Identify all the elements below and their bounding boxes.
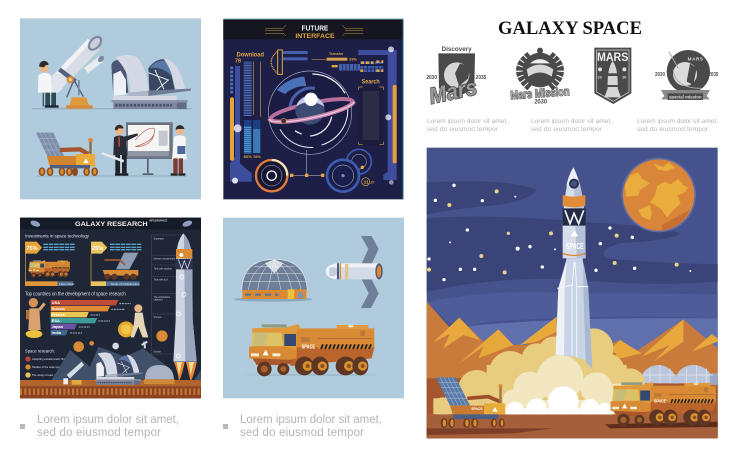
logo: mars shield: MARS	[597, 50, 628, 64]
caption: truck panel	[223, 414, 382, 439]
icon: rover	[436, 377, 505, 428]
chart labels: rocket callouts: chamber	[154, 299, 163, 302]
heading: galaxy research: GALAXY RESEARCH	[75, 221, 148, 228]
logo: discovery mars: 2030	[426, 75, 437, 81]
icon: rover: SPACE	[471, 407, 483, 411]
bar chart: top countries	[25, 292, 131, 335]
logo captions: sed do eiusmod tempor	[427, 126, 499, 133]
icon: astronaut statue	[26, 298, 45, 338]
bar chart: top countries: Russia	[52, 306, 66, 311]
block: space research list: Analyzing extraterrestric flights	[32, 357, 69, 361]
block: search	[359, 79, 383, 145]
block: investments	[25, 234, 142, 286]
icon: bottom dials	[256, 149, 374, 192]
stars	[427, 184, 691, 281]
block: transfer status: Transfer	[329, 52, 344, 56]
sky bands	[427, 181, 718, 352]
logo captions: sed do eiusmod tempor	[531, 126, 603, 133]
logo: mars special mission	[655, 50, 718, 100]
mountains	[427, 302, 718, 385]
icon: space truck	[245, 324, 378, 376]
scene: mountains and base	[20, 341, 201, 398]
ground	[427, 378, 718, 438]
logo: mars special mission: 2035	[708, 72, 718, 78]
icon: truck: SPACE	[654, 399, 666, 404]
block: transfer status	[271, 50, 383, 74]
icon: truck	[607, 382, 719, 426]
icon: small planet	[156, 330, 168, 342]
heading: galaxy research	[30, 219, 193, 228]
block: download meters	[235, 52, 264, 159]
icon: space truck: SPACE	[302, 344, 315, 350]
logo: mars mission: Mars Mission	[510, 84, 570, 102]
logo: discovery mars: 2035	[476, 75, 486, 81]
icon: presenter	[101, 125, 138, 176]
chart labels: rocket callouts: Nozzle	[154, 352, 161, 354]
block: download meters: 76%	[253, 154, 261, 159]
icon: launching rocket: SPACE	[566, 241, 584, 251]
panel: galaxy research infographic	[20, 218, 201, 398]
caption: truck panel: Lorem ipsum dolor sit amet,	[240, 414, 382, 426]
logo: mars special mission: MARS	[688, 57, 703, 62]
icon: bottom dials: 27	[370, 180, 374, 184]
logo row: mars badges	[426, 46, 718, 109]
chart labels: rocket callouts: Separator	[154, 237, 164, 240]
caption: research panel: Lorem ipsum dolor sit amet,	[37, 414, 179, 426]
chart labels: rocket callouts: Interior compartment	[154, 257, 175, 260]
heading: future interface: FUTURE	[302, 24, 328, 33]
title: GALAXY SPACE	[498, 18, 642, 39]
panel: dome, satellite and truck	[223, 218, 404, 398]
block: investments: 25%	[92, 246, 103, 252]
bar chart: top countries: Japan	[52, 324, 64, 329]
icon: presentation board	[126, 122, 173, 175]
icon: rocket	[173, 233, 197, 382]
heading: future interface	[265, 24, 363, 40]
caption: research panel	[20, 414, 179, 439]
icon: mars planet	[621, 158, 696, 232]
icon: mars rover	[36, 133, 98, 176]
logo: mars mission	[510, 48, 570, 106]
bar chart: top countries: USA	[52, 300, 60, 305]
icon: telescope	[41, 33, 105, 109]
block: download meters: 78	[235, 59, 241, 65]
chart labels: rocket callouts: Tank with fuel	[154, 279, 168, 282]
block: download meters: 60%	[244, 154, 252, 159]
launch smoke	[433, 328, 645, 418]
panel: scientists and telescope	[20, 18, 201, 199]
icon: satellite	[326, 236, 383, 308]
panel: rocket launch scene	[427, 148, 719, 438]
icon: ringed planet hud	[268, 71, 354, 154]
panel: future interface	[223, 19, 404, 199]
heading: future interface: INTERFACE	[295, 34, 335, 40]
chart labels: rocket callouts	[152, 235, 183, 354]
bar chart: top countries: India	[52, 330, 62, 335]
bar chart: top countries: Top countries on the development of space research	[25, 292, 126, 298]
logo captions: Lorem ipsum dolor sit amet,	[637, 118, 718, 125]
block: investments: Investments in space technology	[25, 234, 89, 240]
logo: discovery mars: Mars	[427, 73, 479, 109]
block: space research list: The study of outer space	[32, 373, 62, 377]
logo: mars special mission: 2030	[655, 72, 665, 78]
block: transfer status: 33%	[349, 57, 357, 62]
caption: research panel: sed do eiusmod tempor	[37, 427, 161, 439]
logo captions	[427, 118, 718, 133]
icon: second scientist	[171, 125, 187, 176]
chart labels: rocket callouts: Tank with oxidizer	[154, 267, 172, 270]
logo captions: sed do eiusmod tempor	[637, 126, 709, 133]
heading: galaxy research: INFOGRAPHICS	[149, 220, 168, 223]
icon: observatory	[111, 55, 191, 109]
block: search: Search	[362, 79, 380, 86]
logo: mars shield: 30	[622, 75, 626, 79]
logo captions: Lorem ipsum dolor sit amet,	[531, 118, 612, 125]
block: space research list	[25, 349, 69, 378]
icon: bottom dials: 11	[364, 180, 369, 186]
logo: discovery mars	[426, 46, 486, 109]
icon: dome base	[234, 259, 313, 302]
block: investments: Heat shield	[59, 282, 75, 286]
icon: coin and astronaut	[118, 304, 148, 337]
icon: launching rocket	[556, 167, 592, 369]
logo: mars mission: 2030	[534, 100, 548, 106]
logo: mars special mission: special mission	[669, 94, 702, 99]
bar chart: top countries: France	[52, 312, 66, 317]
domes	[638, 365, 718, 385]
block: space research list: Studies of the solar system	[32, 365, 65, 369]
chart labels: rocket callouts: Frames	[154, 316, 162, 319]
icon: scientist at telescope	[38, 61, 59, 108]
block: investments: Study of infrastructure	[111, 282, 140, 286]
bar chart: top countries: ESA	[52, 318, 60, 323]
block: investments: 75%	[26, 246, 38, 252]
logo captions: Lorem ipsum dolor sit amet,	[427, 118, 508, 125]
logo: mars shield: 20	[598, 75, 602, 79]
chart labels: rocket callouts: The combustion	[154, 296, 171, 299]
caption: truck panel: sed do eiusmod tempor	[240, 427, 364, 439]
logo: mars shield	[594, 48, 631, 104]
frame: blue side brackets	[230, 46, 397, 185]
block: space research list: Space research:	[25, 349, 55, 354]
block: download meters: Download	[237, 52, 264, 59]
logo: discovery mars: Discovery	[442, 46, 472, 53]
